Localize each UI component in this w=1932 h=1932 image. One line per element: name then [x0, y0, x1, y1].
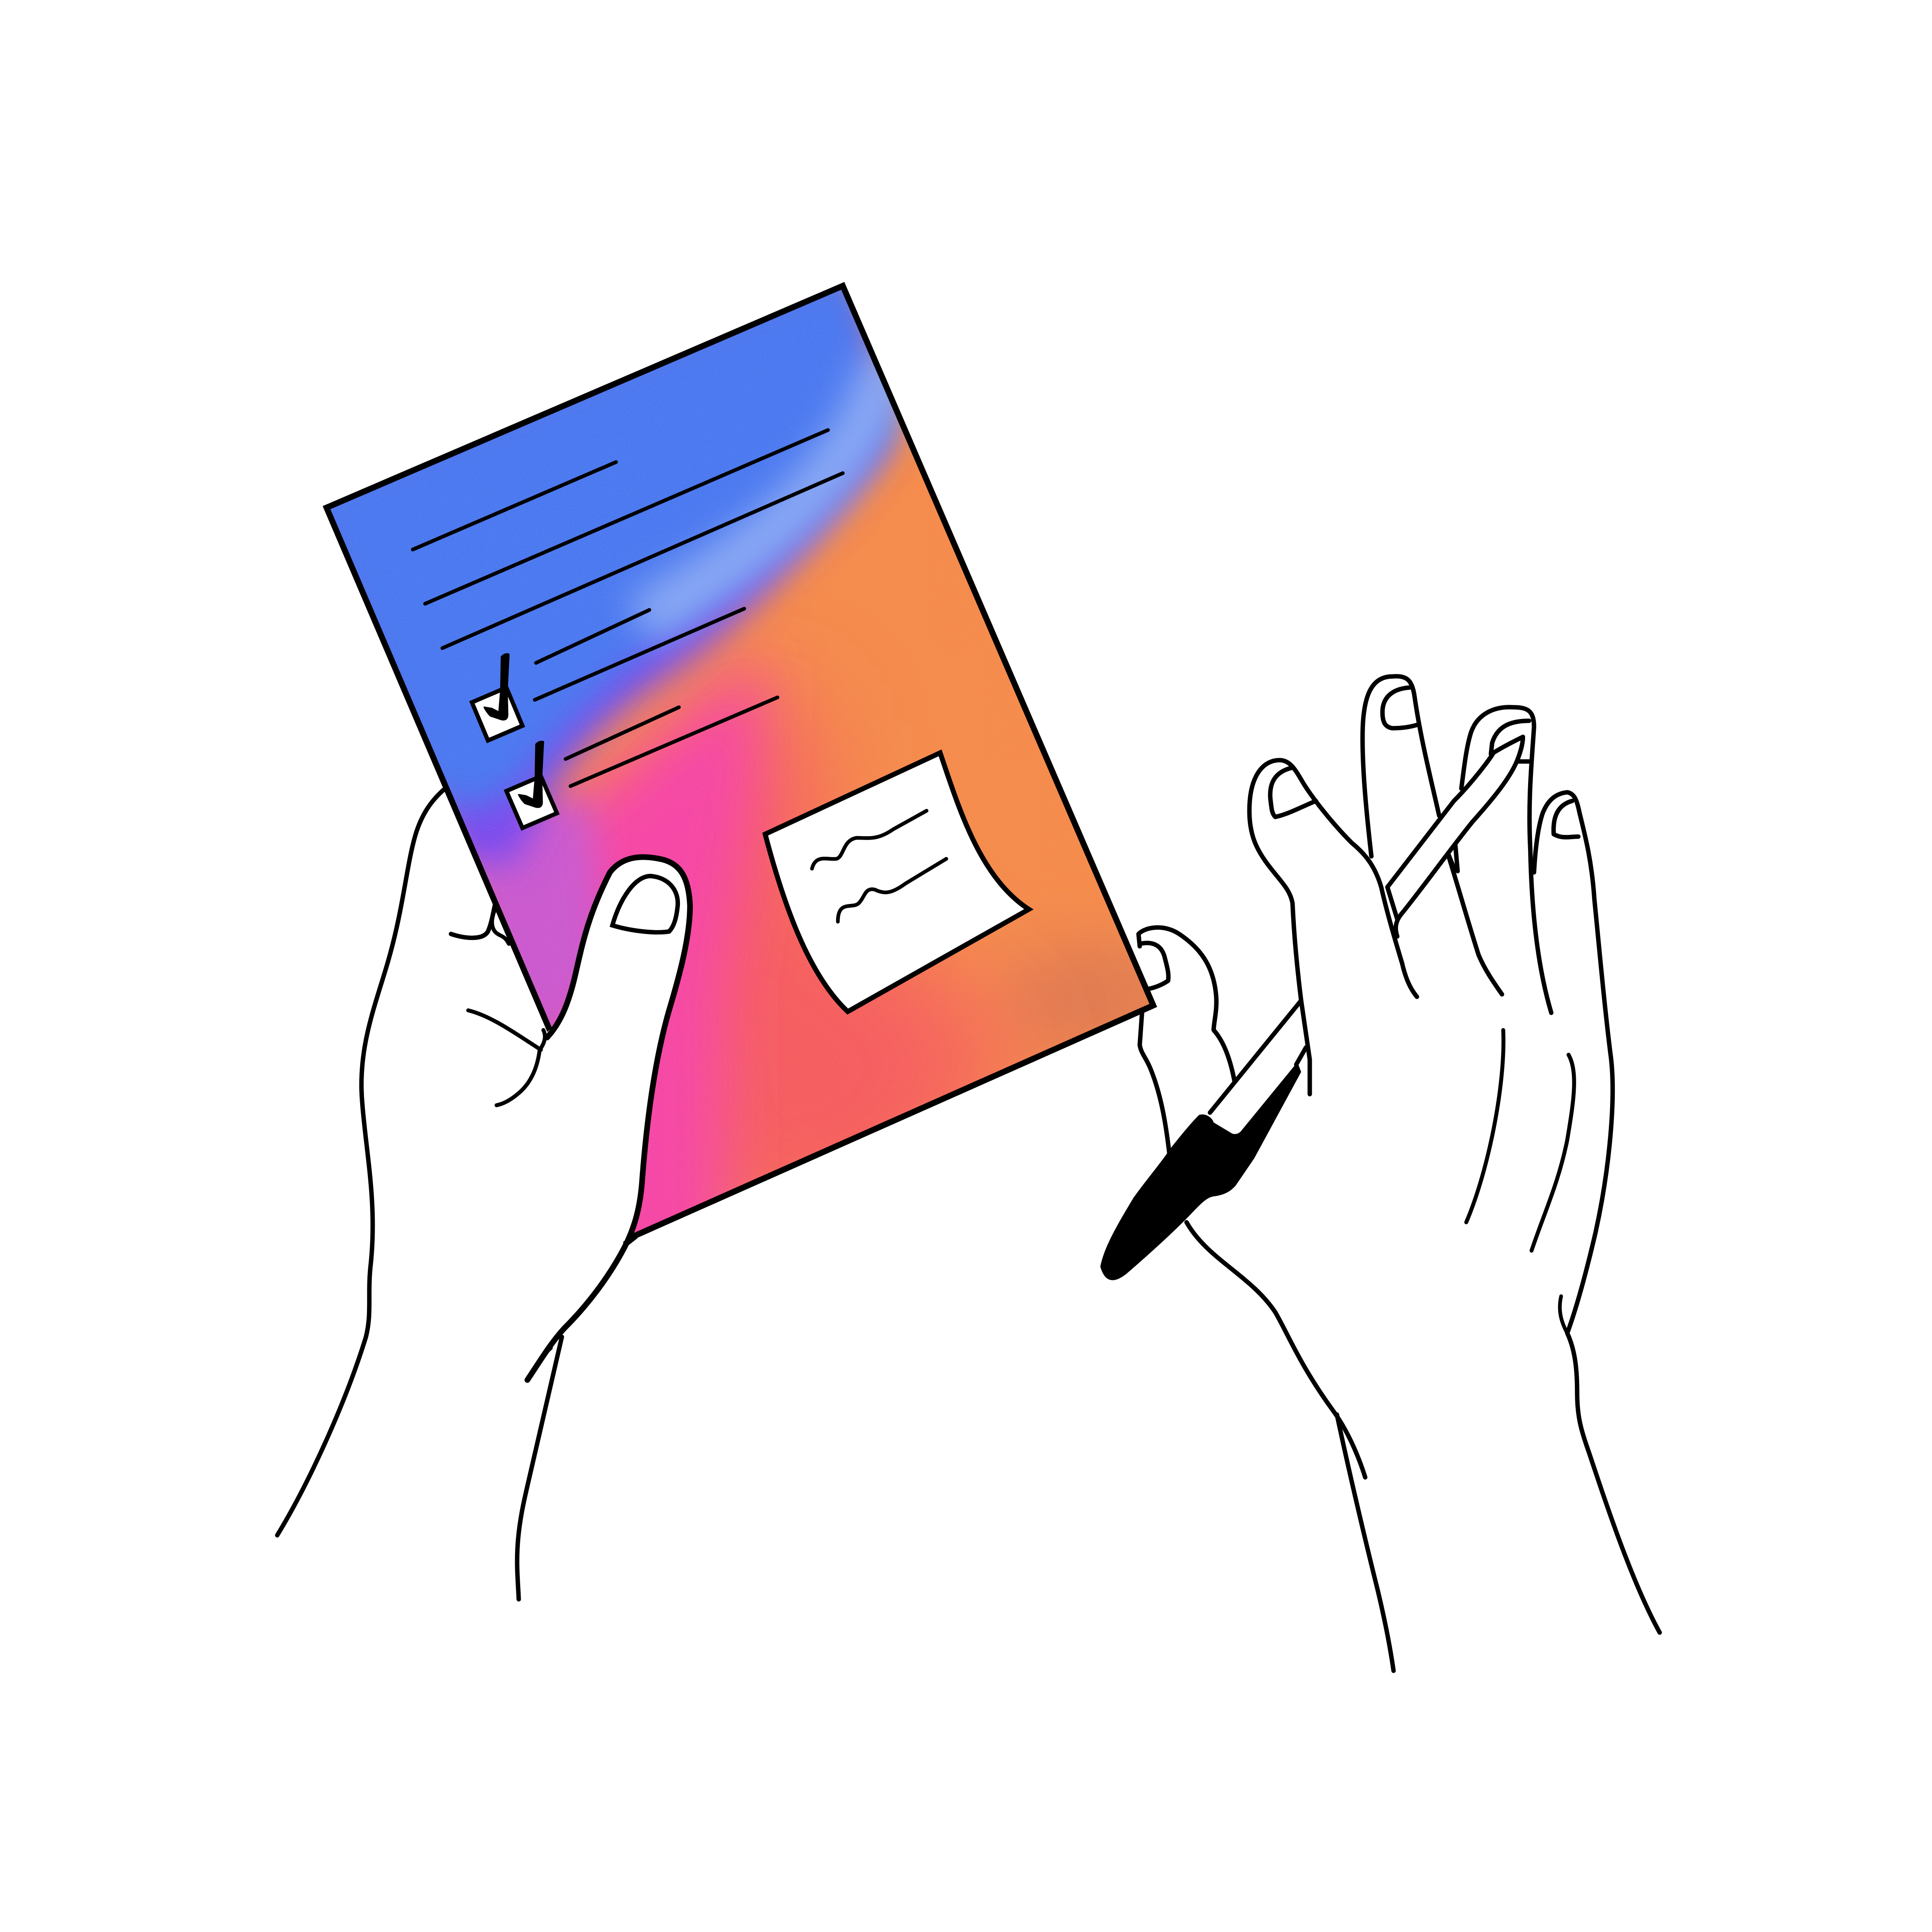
palm crease two — [1532, 1055, 1574, 1251]
pink area — [518, 653, 764, 1306]
thumb base fold — [625, 1236, 636, 1244]
magenta violet blend — [443, 801, 604, 1060]
sticky note — [765, 753, 1029, 1012]
violet underlay — [308, 283, 887, 862]
light blue arc — [641, 357, 890, 622]
ring finger — [1448, 707, 1551, 1013]
pinky finger and hand edge — [1534, 792, 1660, 1632]
ring fingernail — [1491, 721, 1529, 754]
text lines on paper — [413, 430, 843, 786]
illustration: hands with checklist and pen — [275, 282, 1662, 1673]
left hand outline — [277, 790, 562, 1599]
left thumbnail — [613, 876, 678, 932]
wrist crease — [1560, 1296, 1568, 1336]
note squiggle one — [812, 811, 927, 869]
paper outline — [327, 286, 1153, 1236]
middle fingernail — [1383, 688, 1418, 728]
paper gradient — [331, 290, 1149, 1233]
orange falloff — [1014, 937, 1149, 1047]
left thumb — [468, 857, 690, 1380]
forearm line — [1337, 1414, 1394, 1671]
checkbox one — [472, 654, 522, 740]
pen grip — [1100, 1062, 1301, 1280]
white pen lower shaft — [1210, 1001, 1310, 1113]
checkbox two — [507, 741, 557, 828]
left forearm line — [517, 1337, 562, 1599]
middle finger — [1362, 676, 1439, 856]
note squiggle two — [838, 859, 946, 922]
hand creases near paper edge — [468, 912, 551, 1380]
palm crease one — [1466, 1030, 1504, 1222]
right thumb behind paper — [1138, 928, 1234, 1153]
index finger — [1250, 760, 1417, 1001]
blue top region — [296, 259, 893, 813]
wrist lower outline — [1186, 1222, 1365, 1477]
paper noise — [308, 271, 1171, 1257]
pinky fingernail — [1553, 801, 1578, 837]
left hand finger crease — [451, 903, 495, 938]
index fingernail — [1270, 767, 1316, 817]
white pen top section — [1387, 737, 1523, 937]
right hand — [1138, 676, 1660, 1671]
coral band — [704, 678, 1033, 1197]
